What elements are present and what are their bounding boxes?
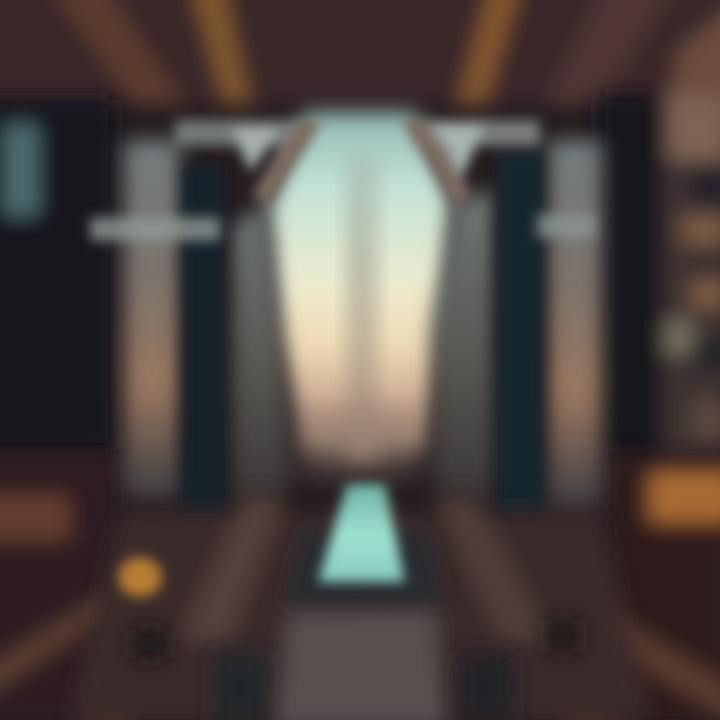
- orange glow: right counter: [650, 472, 720, 522]
- right lower wood: [485, 455, 720, 720]
- pool surround: [285, 530, 445, 605]
- diagonal strut: left: [252, 118, 322, 205]
- foreground seats: [132, 620, 579, 720]
- ceiling corner: right: [650, 0, 720, 170]
- orange lamp glow: [118, 557, 162, 597]
- ceiling beam: far right: [545, 0, 680, 105]
- wood counter: left: [0, 495, 70, 540]
- ceiling: [0, 0, 720, 170]
- dark column: left: [183, 165, 225, 510]
- left glass towers: [124, 140, 290, 510]
- sky opening: [268, 112, 452, 450]
- crossbar: right: [537, 214, 595, 238]
- crossbar: left: [90, 217, 220, 241]
- dark column: right: [496, 150, 542, 510]
- right shelves: [662, 100, 720, 460]
- floor: [70, 495, 650, 720]
- left lower wood: [0, 455, 222, 720]
- right glass towers: [430, 140, 602, 510]
- distant skyline haze: [300, 410, 420, 470]
- floor aisle: [275, 610, 445, 720]
- right dark wall: [598, 95, 720, 460]
- window glimmer: left wall: [4, 125, 38, 215]
- pool reflection: [318, 484, 405, 582]
- central tower: [347, 150, 377, 460]
- ceiling beam: inner left: [190, 0, 250, 105]
- ceiling beam: far left: [45, 0, 185, 105]
- left dark wall: [0, 100, 115, 450]
- white trusses: [90, 118, 595, 241]
- diagonal strut: right: [402, 118, 472, 208]
- ceiling beam: inner right: [458, 0, 522, 105]
